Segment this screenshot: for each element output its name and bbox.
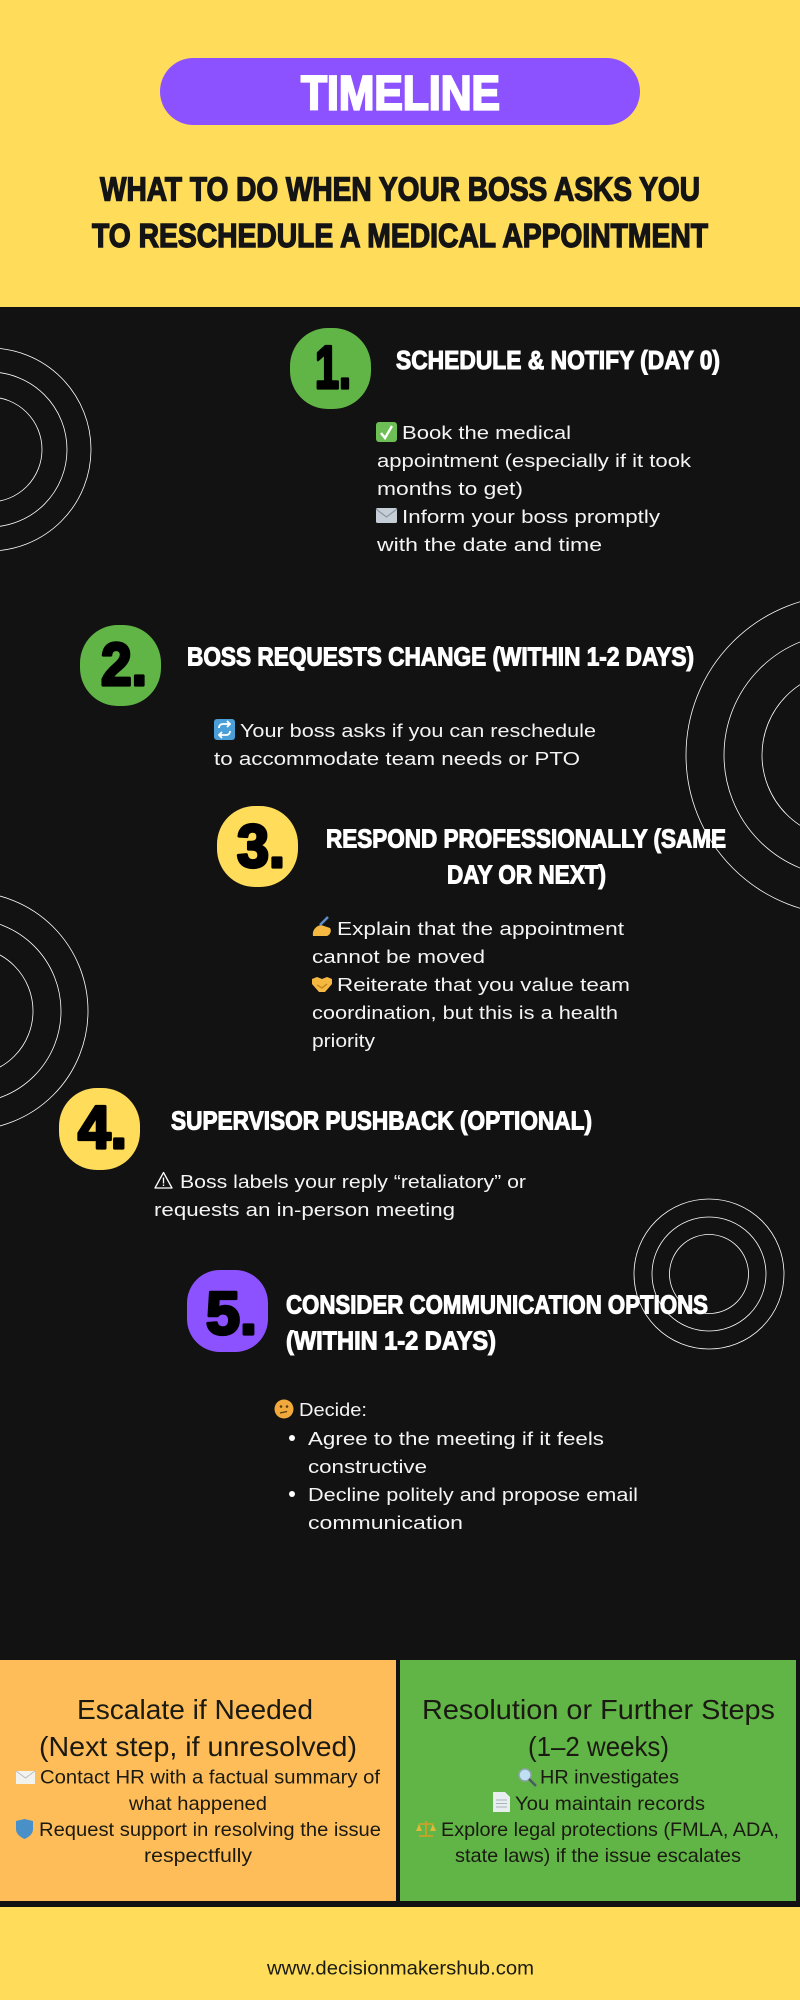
step 5 body text (274, 1399, 638, 1533)
step 5 (187, 1270, 708, 1533)
bullet list: constructive (308, 1456, 427, 1477)
icon: handshake (312, 977, 332, 992)
decorative rings: middle left (0, 892, 88, 1130)
step 1 number badge (290, 328, 371, 409)
panel: resolution or further steps (400, 1660, 796, 1901)
step 3 number badge (217, 806, 298, 887)
title pill: TIMELINE (301, 68, 500, 120)
step 3 body text: cannot be moved (312, 946, 485, 967)
step 5 body text: Decide: (299, 1399, 367, 1420)
escalate text: Contact HR with a factual summary of (40, 1766, 381, 1788)
step 4 (59, 1088, 592, 1220)
step 2 number badge: 2. (101, 631, 147, 698)
step 4 body text: Boss labels your reply “retaliatory” or (180, 1171, 526, 1192)
icon: writing hand (313, 917, 331, 936)
resolution text: state laws) if the issue escalates (455, 1845, 741, 1867)
bullet list: Agree to the meeting if it feels (308, 1428, 604, 1449)
bullet list (289, 1428, 638, 1533)
step 2 number badge (80, 625, 161, 706)
step 2 body text (214, 719, 596, 769)
step 2 body text: Your boss asks if you can reschedule (240, 720, 596, 741)
step 1 number badge: 1. (315, 334, 351, 401)
escalate text: respectfully (144, 1845, 252, 1867)
step 1 heading: SCHEDULE & NOTIFY (DAY 0) (396, 345, 720, 375)
icon: shield (16, 1819, 33, 1839)
header band (0, 0, 800, 307)
escalate text (16, 1766, 381, 1867)
resolution heading: Resolution or Further Steps (422, 1694, 775, 1725)
bullet list: Decline politely and propose email (308, 1484, 638, 1505)
escalate text: Request support in resolving the issue (39, 1819, 381, 1841)
escalate text: what happened (128, 1793, 267, 1815)
step 3 body text: coordination, but this is a health (312, 1002, 618, 1023)
step 4 body text: requests an in-person meeting (154, 1199, 455, 1220)
escalate heading (39, 1694, 357, 1762)
step 3 (217, 806, 726, 1051)
step 2 (80, 625, 694, 769)
step 4 number badge (59, 1088, 140, 1170)
escalate heading: (Next step, if unresolved) (39, 1731, 357, 1762)
website address: www.decisionmakershub.com (266, 1958, 534, 1980)
title pill (160, 58, 640, 125)
decorative rings: upper right (686, 595, 800, 915)
resolution text: You maintain records (515, 1793, 705, 1815)
icon: magnifier (519, 1769, 536, 1786)
step 5 number badge: 5. (206, 1280, 257, 1347)
step 5 number badge (187, 1270, 268, 1352)
icon: balance scales (416, 1821, 436, 1836)
panel: escalate if needed (0, 1660, 396, 1901)
footer band (0, 1907, 800, 2000)
step 3 heading (326, 824, 726, 890)
step 3 heading: RESPOND PROFESSIONALLY (SAME (326, 824, 726, 854)
step 5 heading: CONSIDER COMMUNICATION OPTIONS (286, 1290, 708, 1320)
icon: green check (376, 422, 397, 442)
step 1 body text: months to get) (377, 478, 523, 499)
icon: thinking face (274, 1400, 294, 1418)
step 4 heading: SUPERVISOR PUSHBACK (OPTIONAL) (171, 1106, 592, 1136)
resolution text (416, 1766, 779, 1867)
resolution heading: (1–2 weeks) (528, 1731, 669, 1762)
step 5 heading (286, 1290, 708, 1356)
icon: document (493, 1792, 510, 1812)
subtitle (92, 172, 708, 255)
icon: envelope (376, 508, 397, 523)
step 2 body text: to accommodate team needs or PTO (214, 748, 580, 769)
step 3 body text: priority (312, 1030, 376, 1051)
step 1 body text (376, 422, 692, 555)
step 5 heading: (WITHIN 1-2 DAYS) (286, 1326, 496, 1356)
step 1 body text: Book the medical (402, 422, 571, 443)
resolution text: Explore legal protections (FMLA, ADA, (441, 1819, 779, 1841)
step 3 heading: DAY OR NEXT) (447, 860, 606, 890)
step 3 number badge: 3. (237, 813, 285, 880)
step 2 heading: BOSS REQUESTS CHANGE (WITHIN 1-2 DAYS) (187, 642, 694, 672)
resolution text: HR investigates (540, 1766, 679, 1788)
step 3 body text: Explain that the appointment (337, 918, 624, 939)
resolution heading (422, 1694, 775, 1762)
step 1 body text: with the date and time (376, 534, 602, 555)
icon: repeat arrows (214, 719, 235, 740)
subtitle: WHAT TO DO WHEN YOUR BOSS ASKS YOU (100, 172, 700, 208)
step 4 number badge: 4. (78, 1094, 127, 1161)
step 1 (290, 328, 720, 555)
step 1 body text: appointment (especially if it took (377, 450, 692, 471)
icon: warning triangle (155, 1172, 172, 1188)
decorative rings: lower right (634, 1199, 784, 1349)
decorative rings: upper left (0, 348, 91, 551)
escalate heading: Escalate if Needed (77, 1694, 313, 1725)
step 3 body text (312, 917, 630, 1051)
step 3 body text: Reiterate that you value team (337, 974, 630, 995)
bullet list: communication (308, 1512, 463, 1533)
step 4 body text (154, 1171, 526, 1220)
icon: envelope (16, 1771, 35, 1784)
step 1 body text: Inform your boss promptly (402, 506, 661, 527)
